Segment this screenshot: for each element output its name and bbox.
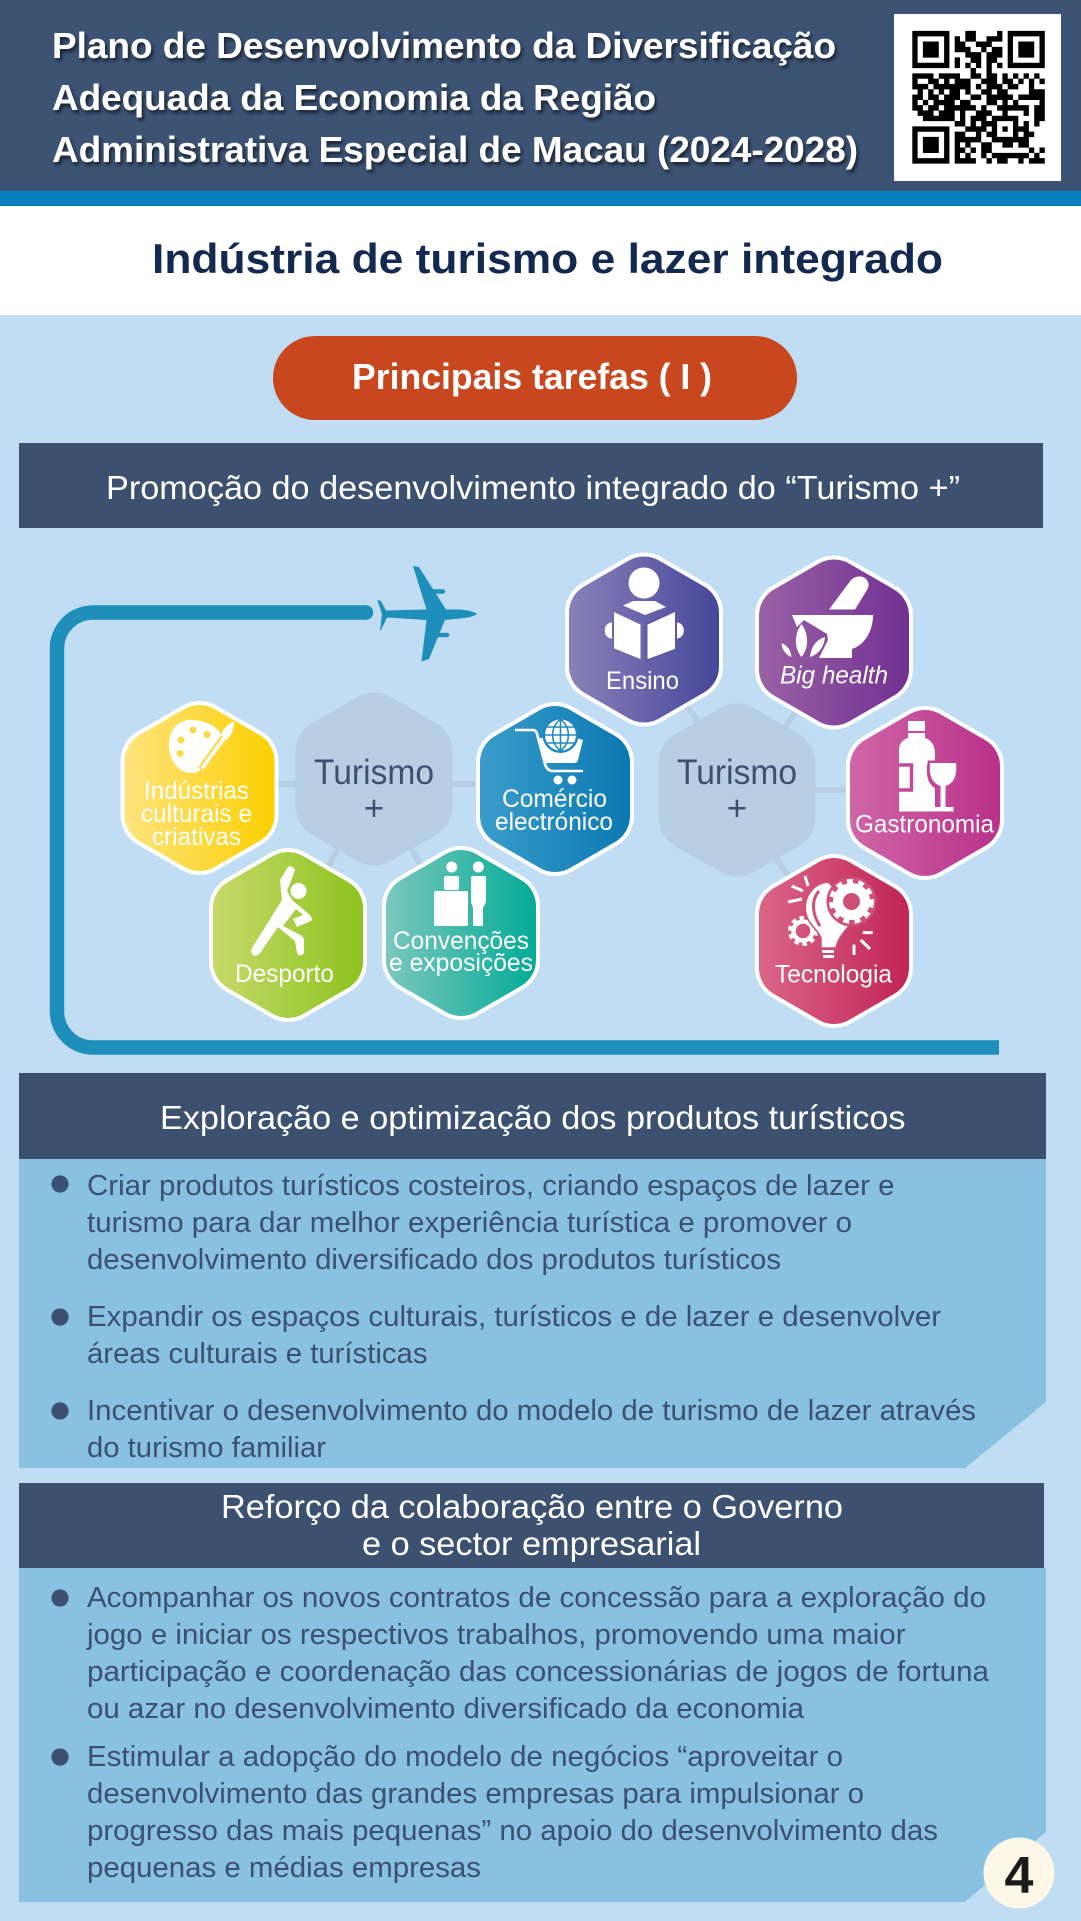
hexagon: Big health: Big health (780, 662, 888, 690)
bullet list (51, 1582, 989, 1884)
hexagon: Convenções e exposições: e exposições (389, 949, 533, 977)
icon: palette and brush (169, 720, 234, 773)
bullet list: Incentivar o desenvolvimento do modelo de turismo de lazer através (87, 1395, 976, 1427)
hexagon: Indústrias culturais e criativas: criativas (152, 823, 241, 851)
hub: Turismo + left: Turismo (314, 753, 434, 792)
bullet list: Acompanhar os novos contratos de concessão para a exploração do (87, 1582, 986, 1614)
hexagon: Convenções e exposições (384, 848, 538, 1018)
hub: Turismo + right (660, 705, 814, 875)
hexagon: Ensino: Ensino (606, 667, 679, 695)
pill: principal tasks: Principais tarefas ( I ) (352, 356, 712, 397)
bullet list: do turismo familiar (87, 1432, 327, 1464)
bullet list: jogo e iniciar os respectivos trabalhos, promovendo uma maior (86, 1619, 906, 1651)
hub: Turismo + left (297, 694, 451, 864)
hexagon: Desporto: Desporto (235, 960, 334, 988)
hexagon: Comércio electrónico: electrónico (495, 808, 613, 836)
panel body (19, 1159, 1046, 1468)
flight path arrow (57, 605, 999, 1048)
bullet list (51, 1170, 976, 1464)
icon: people at a counter (434, 862, 486, 926)
panel heading: Exploração e optimização dos produtos turísticos (160, 1099, 906, 1136)
hexagon: Tecnologia (757, 856, 911, 1026)
panel heading (19, 1073, 1046, 1159)
section heading: Turismo + (19, 443, 1043, 528)
icon: shopping cart with globe (515, 717, 583, 784)
icon: stretching person (251, 866, 312, 956)
hexagon: Comércio electrónico: Comércio (502, 785, 607, 813)
panel body (19, 1568, 1046, 1902)
bullet list: pequenas e médias empresas (87, 1852, 481, 1884)
hexagon: Gastronomia: Gastronomia (855, 810, 994, 838)
hexagon: Desporto (211, 850, 365, 1020)
hexagon: Gastronomia (848, 708, 1002, 878)
hexagon: Tecnologia: Tecnologia (775, 960, 892, 988)
bullet list: áreas culturais e turísticas (87, 1338, 428, 1370)
header banner (0, 0, 1081, 206)
bullet list: ou azar no desenvolvimento diversificado da economia (87, 1693, 804, 1725)
main title: Adequada da Economia da Região (52, 77, 656, 118)
bullet list: desenvolvimento das grandes empresas para impulsionar o (87, 1778, 864, 1810)
hexagon: Indústrias culturais e criativas (122, 703, 277, 873)
hexagon: Indústrias culturais e criativas: culturais e (141, 800, 252, 828)
icon: mortar, pestle and herb (782, 576, 873, 658)
icon: airplane (377, 566, 478, 662)
subtitle band (0, 206, 1081, 315)
QR code (894, 14, 1061, 181)
panel heading: Reforço da colaboração entre o Governo (221, 1488, 843, 1525)
hexagon: Indústrias culturais e criativas: Indústrias (144, 777, 249, 805)
panel heading (19, 1483, 1044, 1568)
hub connectors (199, 703, 925, 885)
panel: reforço da colaboração (19, 1483, 1046, 1902)
bullet list: Estimular a adopção do modelo de negócios “aproveitar o (87, 1741, 843, 1773)
main title: Administrativa Especial de Macau (2024-2028) (52, 129, 858, 170)
icon: person reading a book (605, 568, 684, 660)
icon: light bulb with gears (788, 876, 876, 958)
bullet list: Expandir os espaços culturais, turísticos e de lazer e desenvolver (87, 1301, 942, 1333)
page number badge: 4 (1005, 1847, 1034, 1905)
main title: Plano de Desenvolvimento da Diversificação (52, 25, 836, 66)
bullet list: desenvolvimento diversificado dos produtos turísticos (87, 1244, 781, 1276)
subtitle: Indústria de turismo e lazer integrado (152, 235, 943, 282)
panel: exploração e optimização (19, 1073, 1046, 1468)
panel heading: e o sector empresarial (362, 1525, 701, 1562)
hub: Turismo + left: + (364, 789, 384, 828)
pill: principal tasks (273, 336, 797, 420)
page number badge (984, 1838, 1054, 1908)
hub: Turismo + right: + (727, 789, 747, 828)
main title (52, 25, 858, 170)
section heading: Turismo +: Promoção do desenvolvimento integrado do “Turismo +” (106, 469, 960, 506)
hexagon: Ensino (567, 554, 721, 725)
hexagon: Convenções e exposições: Convenções (393, 927, 529, 955)
bullet list: Criar produtos turísticos costeiros, criando espaços de lazer e (87, 1170, 894, 1202)
hub: Turismo + right: Turismo (677, 753, 797, 792)
hexagon: Comércio electrónico (478, 704, 632, 874)
hexagon: Big health (757, 557, 911, 728)
icon: bottle and wine glass (899, 721, 956, 812)
bullet list: progresso das mais pequenas” no apoio do desenvolvimento das (87, 1815, 938, 1847)
bullet list: turismo para dar melhor experiência turística e promover o (87, 1207, 852, 1239)
bullet list: participação e coordenação das concessionárias de jogos de fortuna (87, 1656, 989, 1688)
